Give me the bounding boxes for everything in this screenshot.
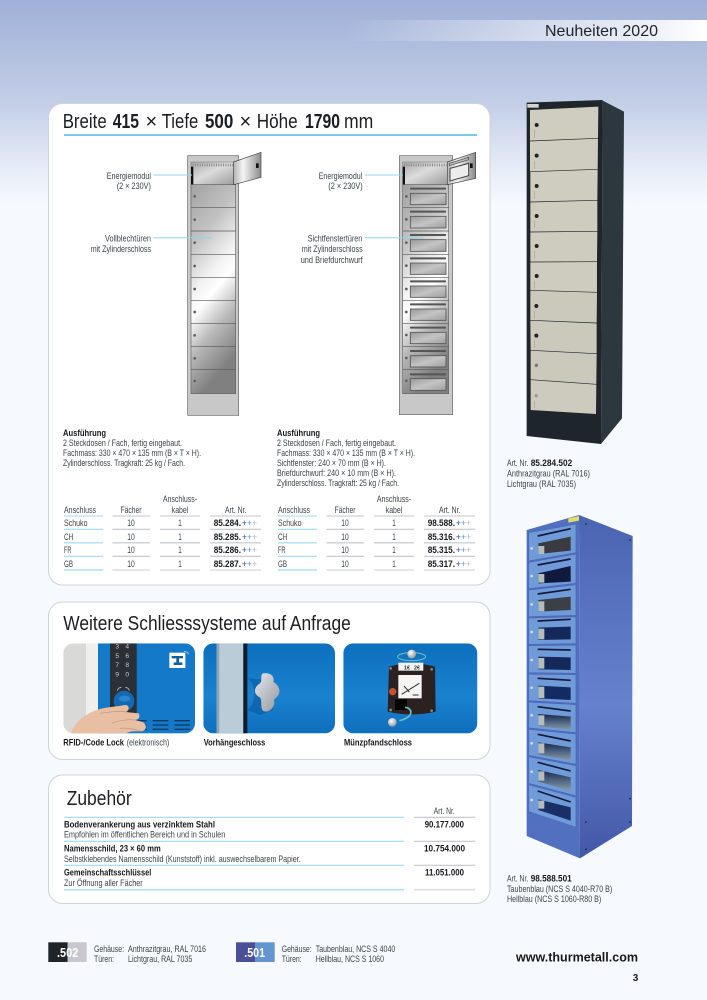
table: article numbers left: CH [64,532,73,542]
table: article numbers left: 10 [127,532,135,542]
row: master key: 11.051.000 [425,867,464,877]
text block: specification left: Fachmass: 330 × 470 × 135 mm (B × T × H). [63,448,201,458]
heading: locking systems: Weitere Schliesssysteme auf Anfrage [63,613,351,635]
table: article numbers left: +++ [242,518,257,528]
header band: Neuheiten 2020 [545,23,658,40]
title: dimensions: Höhe [257,111,298,133]
table: article numbers right: 10 [341,545,349,555]
table: article numbers right [278,494,475,570]
title: dimensions: Tiefe [162,111,198,133]
colour key: .502: Anthrazitgrau, RAL 7016 [128,944,206,954]
text block: specification right: Briefdurchwurf: 240 × 10 mm (B × H). [277,468,396,478]
colour key: .501: .501 [244,945,265,960]
caption: blue cabinet [507,874,612,904]
caption: blue cabinet: Art. Nr. [507,874,528,884]
photo: coin deposit lock [343,643,477,733]
caption: anthracite cabinet: Art. Nr. [507,458,528,468]
title: dimensions: 500 [205,111,233,133]
table: article numbers right: GB [278,559,287,569]
table: article numbers left: 10 [127,559,135,569]
table: article numbers left: 85.284. [214,518,241,528]
title: dimensions: 1790 [305,111,340,133]
row: floor anchoring: Bodenverankerung aus verzinktem Stahl [64,819,215,829]
text block: specification right: Fachmass: 330 × 470 × 135 mm (B × T × H). [277,448,415,458]
colour key: .502: Gehäuse: [94,944,124,954]
colour key: .501 [236,942,395,964]
panel: accessories [48,775,490,904]
photo: RFID code lock: 8 [125,662,129,669]
photo: RFID code lock: 4 [125,644,129,651]
photo: blue cabinet [527,515,633,858]
row: name plate: Namensschild, 23 × 60 mm [64,843,161,853]
photo: coin deposit lock: 1€ [404,665,410,671]
photo: RFID code lock: 3 [115,644,119,651]
table: article numbers left: 10 [127,518,135,528]
photo: RFID code lock: 7 [115,662,119,669]
diagram: window door cabinet [399,152,476,415]
caption: blue cabinet: 98.588.501 [531,874,572,884]
title: dimensions: Breite [63,111,107,133]
photo: anthracite cabinet [527,100,624,444]
photo: RFID code lock: 6 [125,653,129,660]
table: article numbers right: 10 [341,532,349,542]
table: article numbers right: Anschluss [278,505,310,515]
callout: window doors: mit Zylinderschloss [302,244,363,254]
table: article numbers right: 98.588. [428,518,455,528]
title: dimensions: × [146,111,157,133]
callout: window doors [301,234,423,265]
table: article numbers left: 1 [178,532,182,542]
colour key: .501: Taubenblau, NCS S 4040 [316,944,395,954]
table: article numbers left: 85.286. [214,545,241,555]
table: article numbers right: 10 [341,559,349,569]
text block: specification right [277,428,415,488]
callout: energy module left: Energiemodul [107,171,151,181]
table: article numbers left: +++ [242,545,257,555]
table: article numbers left: Anschluss [64,505,96,515]
table: article numbers left: 10 [127,545,135,555]
table: article numbers left: Fächer [120,505,142,515]
table: article numbers left: Anschluss- [163,494,197,504]
column label: article number: Art. Nr. [434,806,455,816]
caption: anthracite cabinet [507,458,590,489]
row: name plate [64,843,465,864]
table: article numbers left: 85.285. [214,532,241,542]
callout: solid doors: mit Zylinderschloss [91,244,151,254]
callout: energy module left [107,171,192,191]
text block: specification left [63,428,201,468]
caption: padlock: Vorhängeschloss [204,738,265,748]
table: article numbers right: 1 [392,559,396,569]
callout: energy module right: Energiemodul [319,171,362,181]
table: article numbers left: 1 [178,545,182,555]
caption: anthracite cabinet: Anthrazitgrau (RAL 7016) [507,469,590,479]
callout: energy module right: (2 × 230V) [328,181,363,191]
diagram: solid door cabinet [188,152,261,415]
colour key: .502: Türen: [94,954,114,964]
table: article numbers right: Anschluss- [377,494,411,504]
callout: solid doors: Vollblechtüren [105,234,151,244]
table: article numbers right: CH [278,532,287,542]
row: name plate: 10.754.000 [424,843,465,853]
colour key: .501: Türen: [282,954,302,964]
row: floor anchoring: 90.177.000 [425,819,464,829]
table: article numbers right: +++ [456,532,471,542]
table: article numbers left: FR [64,545,72,555]
title: dimensions [63,111,373,133]
table: article numbers right: 85.315. [428,545,455,555]
panel: locking systems [48,602,490,760]
table: article numbers right: 1 [392,532,396,542]
table: article numbers right: 85.316. [428,532,455,542]
table: article numbers left: Schuko [64,518,88,528]
caption: blue cabinet: Taubenblau (NCS S 4040-R70 B) [507,884,612,894]
table: article numbers right: 10 [341,518,349,528]
caption: anthracite cabinet: 85.284.502 [531,458,572,468]
panel: dimensions and variants [48,104,490,585]
colour key: .501: Hellblau, NCS S 1060 [316,954,384,964]
photo: RFID code lock: 9 [115,671,119,678]
table: article numbers left [64,494,261,570]
table: article numbers left: +++ [242,532,257,542]
page number: 3 [633,973,639,984]
header band [345,20,707,41]
website: www.thurmetall.com [515,950,638,965]
caption: coin lock: Münzpfandschloss [344,738,412,748]
callout: energy module left: (2 × 230V) [117,181,151,191]
text block: specification left: Zylinderschloss. Tragkraft: 25 kg / Fach. [63,458,185,468]
photo: RFID code lock: 0 [125,671,129,678]
title: dimensions: 415 [113,111,139,133]
table: article numbers right: +++ [456,518,471,528]
table: article numbers right: +++ [456,545,471,555]
row: master key: Zur Öffnung aller Fächer [64,878,143,888]
callout: energy module right [319,171,403,191]
table: article numbers left: 1 [178,518,182,528]
colour key: .501: Gehäuse: [282,944,312,954]
photo: RFID code lock: 5 [115,653,119,660]
row: name plate: Selbstklebendes Namensschild (Kunststoff) inkl. auswechselbarem Papier. [64,854,301,864]
photo: coin deposit lock: 2€ [414,665,420,671]
photo: RFID code lock [63,643,195,735]
table: article numbers left: 85.287. [214,559,241,569]
table: article numbers right: 1 [392,518,396,528]
table: article numbers right: 85.317. [428,559,455,569]
text block: specification right: Ausführung [277,428,320,438]
text block: specification right: Zylinderschloss. Tragkraft: 25 kg / Fach. [277,478,399,488]
caption: anthracite cabinet: Lichtgrau (RAL 7035) [507,479,576,489]
title: dimensions: mm [344,111,373,133]
table: article numbers left: GB [64,559,73,569]
row: floor anchoring: Empfohlen im öffentlichen Bereich und in Schulen [64,830,225,840]
text block: specification right: Sichtfenster: 240 × 70 mm (B × H). [277,458,386,468]
table: article numbers right: FR [278,545,286,555]
callout: window doors: Sichtfenstertüren [308,234,362,244]
text block: specification left: 2 Steckdosen / Fach, fertig eingebaut. [63,438,182,448]
photo: padlock [203,643,335,733]
colour key: .502 [48,942,206,964]
heading: accessories: Zubehör [67,788,132,810]
text block: specification right: 2 Steckdosen / Fach, fertig eingebaut. [277,438,396,448]
callout: solid doors [91,234,212,254]
table: article numbers left: Art. Nr. [225,505,246,515]
row: master key [64,867,464,888]
callout: window doors: und Briefdurchwurf [301,255,363,265]
table: article numbers right: Art. Nr. [439,505,460,515]
caption: RFID: (elektronisch) [127,738,169,748]
title: dimensions: × [240,111,251,133]
row: master key: Gemeinschaftsschlüssel [64,867,151,877]
table: article numbers right: 1 [392,545,396,555]
colour key: .502: Lichtgrau, RAL 7035 [128,954,192,964]
table: article numbers left: kabel [172,505,188,515]
table: article numbers right: +++ [456,559,471,569]
table: article numbers left: 1 [178,559,182,569]
colour key: .502: .502 [57,945,78,960]
table: article numbers right: Schuko [278,518,302,528]
caption: RFID: RFID-/Code Lock [63,738,125,748]
row: floor anchoring [64,819,464,840]
table: article numbers right: Fächer [334,505,356,515]
text block: specification left: Ausführung [63,428,106,438]
table: article numbers right: kabel [386,505,402,515]
table: article numbers left: +++ [242,559,257,569]
caption: blue cabinet: Hellblau (NCS S 1060-R80 B) [507,894,601,904]
